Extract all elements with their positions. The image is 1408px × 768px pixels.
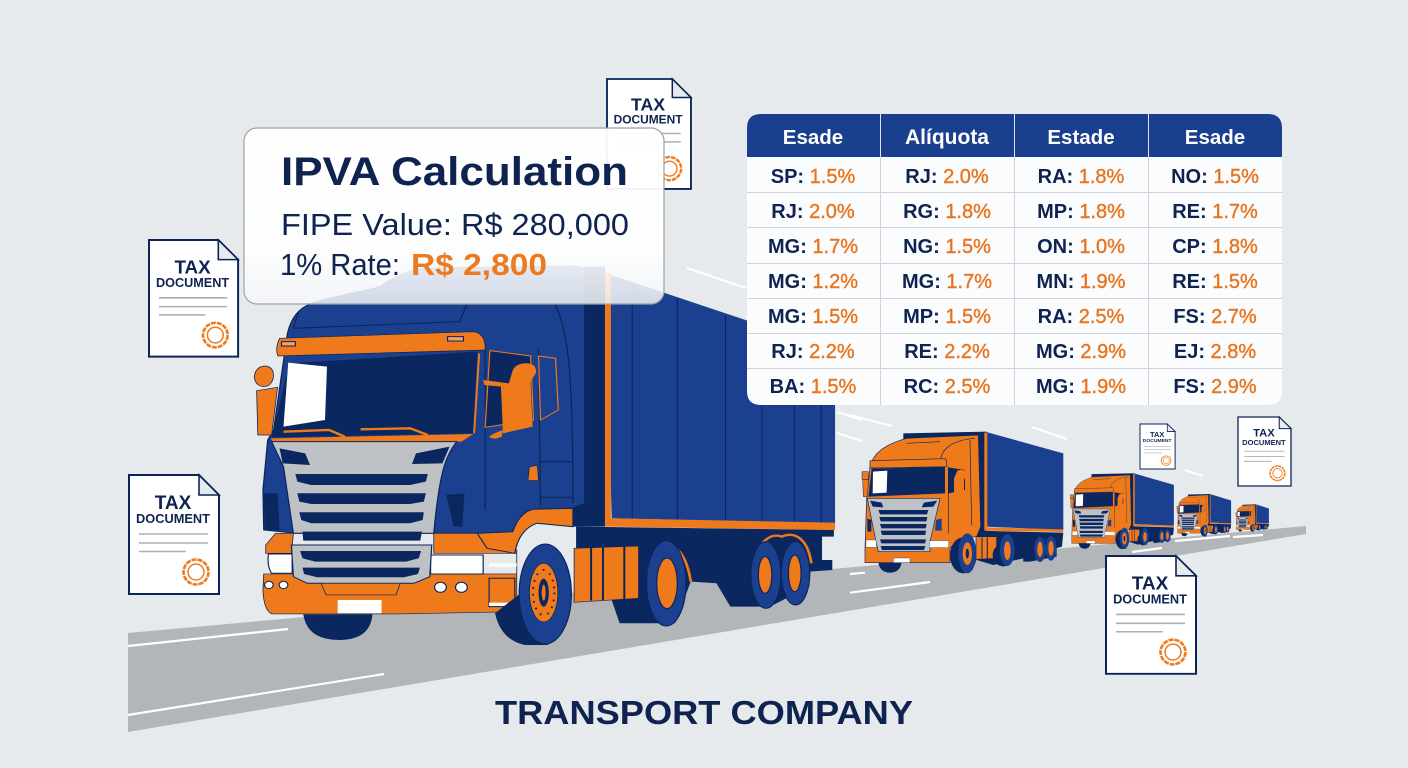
icon: tax document medium: TAX [1253,428,1275,440]
table rows: BA: 1.5% [770,376,857,398]
trailer wheels [751,535,811,608]
icon: tax document small [1140,424,1175,469]
table rows: MG: 1.2% [768,271,858,293]
table rows: ON: 1.0% [1037,236,1125,258]
table rows: SP: 1.5% [771,166,855,188]
icon: tax document left lower: TAX [155,493,192,514]
table rows: MN: 1.9% [1037,271,1126,293]
door handle [528,465,539,481]
table rows: MG: 1.7% [902,271,992,293]
main blue truck [254,266,835,645]
small truck 2 [1070,473,1174,549]
icon: tax document left upper: DOCUMENT [156,276,229,290]
table rows: EJ: 2.8% [1174,341,1256,363]
table rows: RE: 1.5% [1172,271,1258,293]
road [128,526,1306,732]
icon: tax document small: TAX [1150,430,1164,439]
table rows: RG: 1.8% [903,201,991,223]
small truck 4 [1236,504,1269,532]
table rows: FS: 2.9% [1173,376,1257,398]
icon: tax document left upper [149,240,238,357]
table header: Esade [783,126,843,149]
icon: tax document bottom right: DOCUMENT [1113,592,1187,607]
table rows: RJ: 2.0% [771,201,855,223]
icon: tax document top: TAX [631,94,665,114]
icon: tax document left upper: TAX [174,256,211,277]
table: state rates [747,114,1282,405]
table rows: RA: 2.5% [1038,306,1125,328]
table rows: RE: 2.2% [904,341,990,363]
rear cab wheel [646,541,691,626]
table rows: CP: 1.8% [1172,236,1258,258]
right mirror [483,363,536,433]
side windows [485,351,533,427]
table header: Alíquota [905,126,989,149]
rate line: 1% Rate: [280,247,400,282]
chassis [576,527,834,623]
icon: tax document left lower: DOCUMENT [136,511,210,526]
icon: tax document bottom right [1106,556,1196,674]
table rows: MG: 2.9% [1036,341,1126,363]
table rows: NO: 1.5% [1171,166,1259,188]
side vents [264,493,465,530]
FIPE value line: FIPE Value: R$ 280,000 [281,207,629,242]
front left wheel [303,614,372,640]
table header [747,114,1282,157]
grille [272,442,457,541]
small truck 1 [862,432,1063,573]
icon: tax document top: DOCUMENT [614,112,683,126]
motion lines [687,268,1203,476]
table rows: FS: 2.7% [1173,306,1257,328]
icon: tax document medium [1238,417,1291,486]
icon: tax document bottom right: TAX [1132,574,1169,595]
windshield [272,352,477,437]
table rows: MP: 1.5% [903,306,991,328]
left mirror [254,366,278,435]
trailer [603,273,835,530]
icon: tax document medium: DOCUMENT [1242,438,1286,447]
table header: Estade [1047,126,1115,149]
table rows: MG: 1.5% [768,306,858,328]
table rows: MP: 1.8% [1037,201,1125,223]
table rows: RE: 1.7% [1172,201,1258,223]
fuel tank [574,546,639,602]
icon: tax document left lower [129,475,219,594]
panel: IPVA calculation [244,128,664,304]
table rows [768,166,1259,398]
bumper [263,508,573,614]
small truck 3 [1177,494,1231,536]
table rows: MG: 1.9% [1036,376,1126,398]
table rows: RA: 1.8% [1038,166,1125,188]
front right wheel [495,544,571,645]
icon: tax document small: DOCUMENT [1143,438,1172,444]
table header: Esade [1185,126,1245,149]
title: transport company: TRANSPORT COMPANY [495,695,913,732]
table rows: RJ: 2.2% [771,341,855,363]
visor [277,332,485,356]
table rows: RC: 2.5% [904,376,991,398]
table rows: NG: 1.5% [903,236,991,258]
icon: tax document top [607,79,691,189]
rate result: R$ 2,800 [411,247,547,282]
table rows: RJ: 2.0% [905,166,989,188]
table rows: MG: 1.7% [768,236,858,258]
cab [254,266,605,614]
heading: IPVA Calculation [281,150,628,194]
